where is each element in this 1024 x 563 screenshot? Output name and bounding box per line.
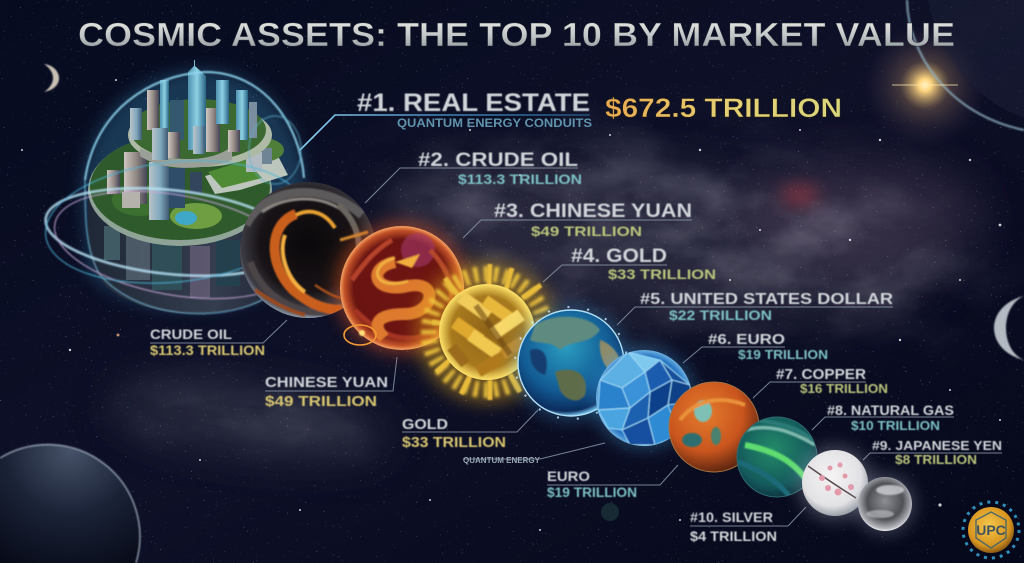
planet: gold bars: [415, 260, 559, 404]
label: #4 gold: #4. GOLD: [571, 246, 667, 267]
label: #6 euro: [708, 331, 828, 362]
sublabel: quantum energy conduits: QUANTUM ENERGY CONDUITS: [397, 116, 592, 130]
energy rings: [39, 72, 311, 315]
label: #3 chinese yuan: #3. CHINESE YUAN: [494, 201, 692, 222]
label: #9 japanese yen: [872, 438, 1002, 467]
icon: crescent moon right edge: [994, 296, 1024, 360]
label: #5 united states dollar: $22 TRILLION: [669, 308, 772, 323]
label: #8 natural gas: #8. NATURAL GAS: [827, 403, 954, 418]
callout: euro: [547, 468, 637, 500]
label: #1 real estate: #1. REAL ESTATE: [357, 89, 590, 117]
planet: japanese yen cherry blossom: [797, 445, 873, 521]
planet: chinese yuan dragon: [335, 221, 469, 355]
callout: quantum energy: QUANTUM ENERGY: [463, 455, 540, 465]
label: #10 silver: #10. SILVER: [690, 509, 773, 525]
planet: natural gas: [737, 417, 817, 497]
label: #4 gold: $33 TRILLION: [608, 266, 716, 282]
title: COSMIC ASSETS: THE TOP 10 BY MARKET VALUE: [78, 16, 955, 53]
icon: crescent moon top left: [44, 64, 59, 92]
planet: euro crystal: [592, 346, 696, 450]
icon: coin logo: UPC: [976, 522, 1006, 538]
callout: euro: EURO: [547, 468, 590, 484]
callout: gold: GOLD: [402, 416, 448, 433]
label: #9 japanese yen: #9. JAPANESE YEN: [872, 438, 1002, 453]
label: #7 copper: #7. COPPER: [776, 367, 867, 383]
callout: chinese yuan: CHINESE YUAN: [265, 374, 388, 391]
skyline towers: [130, 60, 257, 160]
planet: united states dollar earth: [513, 305, 629, 421]
callout: chinese yuan: [265, 374, 388, 410]
label: #5 united states dollar: #5. UNITED STATES DOLLAR: [640, 291, 894, 308]
callout: crude oil: CRUDE OIL: [150, 326, 232, 342]
callout: gold: [402, 416, 506, 451]
label: #2 crude oil: #2. CRUDE OIL: [418, 150, 578, 171]
callout: euro: $19 TRILLION: [547, 485, 637, 500]
label: #9 japanese yen: $8 TRILLION: [895, 453, 977, 467]
callout: gold: $33 TRILLION: [402, 435, 506, 451]
label: #4 gold: [571, 246, 716, 282]
value: $672.5 trillion: $672.5 TRILLION: [605, 93, 842, 123]
callout: crude oil: $113.3 TRILLION: [150, 342, 265, 358]
callout: chinese yuan: $49 TRILLION: [265, 393, 377, 410]
planet: real estate city sphere: [39, 60, 311, 315]
label: #2 crude oil: $113.3 TRILLION: [458, 171, 582, 187]
planet: crude oil: [240, 182, 376, 318]
lower buildings: [107, 148, 272, 220]
label: #8 natural gas: [827, 403, 954, 433]
label: #6 euro: $19 TRILLION: [738, 347, 828, 362]
label: #1 real estate: [357, 89, 592, 130]
label: #8 natural gas: $10 TRILLION: [851, 419, 940, 433]
label: #7 copper: $16 TRILLION: [800, 382, 888, 396]
label: #6 euro: #6. EURO: [708, 331, 785, 348]
label: #10 silver: $4 TRILLION: [690, 528, 777, 544]
icon: large planet bottom left: [0, 445, 140, 563]
label: #3 chinese yuan: $49 TRILLION: [531, 223, 642, 239]
leader lines: [150, 115, 1002, 526]
label: #2 crude oil: [418, 150, 582, 187]
glass dome glow: [82, 70, 306, 310]
callout: crude oil: [150, 326, 265, 358]
upper terrace: [128, 99, 272, 168]
icon: coin logo: [963, 502, 1019, 558]
planet: silver: [854, 473, 916, 535]
city base cylinder: [88, 198, 298, 314]
label: #10 silver: [690, 509, 777, 544]
icon: glowing star and horizon arc top right: [863, 0, 1024, 147]
label: #5 united states dollar: [640, 291, 894, 323]
planet: copper: [669, 382, 759, 472]
label: #3 chinese yuan: [494, 201, 692, 239]
lower green terrace: [88, 134, 288, 246]
icon: tiny planet bottom: [601, 503, 619, 521]
label: #7 copper: [776, 367, 888, 396]
